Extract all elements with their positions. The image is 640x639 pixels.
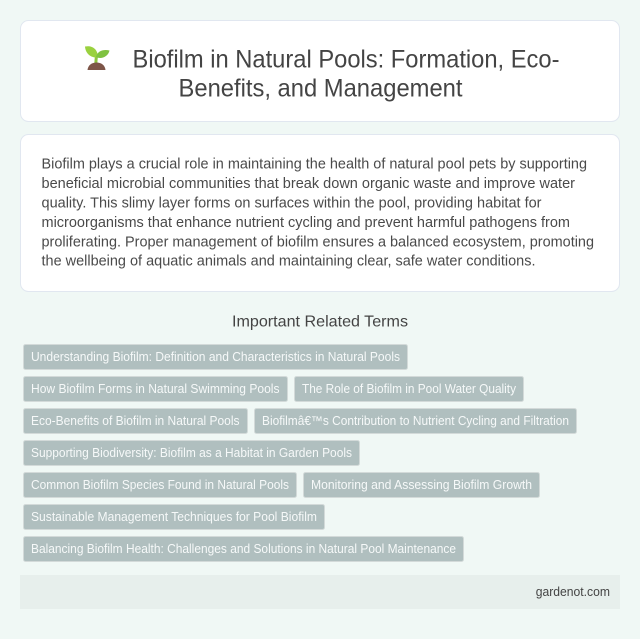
panel: title card bbox=[20, 20, 620, 122]
chip: how biofilm forms bbox=[24, 376, 288, 402]
chip: how biofilm forms: How Biofilm Forms in Natural Swimming Pools bbox=[31, 382, 280, 396]
chip: understanding biofilm bbox=[24, 344, 408, 370]
title text: Biofilm in Natural Pools: Formation, Eco- bbox=[132, 46, 560, 74]
heading: related terms: Important Related Terms bbox=[232, 314, 408, 330]
panel: related term chips bbox=[24, 344, 576, 562]
chip: sustainable management: Sustainable Management Techniques for Pool Biofilm bbox=[31, 510, 317, 524]
chip: role of biofilm: The Role of Biofilm in Pool Water Quality bbox=[302, 382, 517, 396]
description paragraph: beneficial microbial communities that break down organic waste and improve water bbox=[42, 175, 575, 192]
chip: eco-benefits bbox=[24, 408, 248, 434]
description paragraph: quality. This slimy layer forms on surfaces within the pool, providing habitat for bbox=[42, 194, 542, 211]
title text: Benefits, and Management bbox=[178, 74, 463, 102]
chip: balancing health: Balancing Biofilm Health: Challenges and Solutions in Natural Pool Maintenance bbox=[31, 542, 456, 556]
chip: eco-benefits: Eco-Benefits of Biofilm in Natural Pools bbox=[31, 414, 240, 428]
description paragraph: Biofilm plays a crucial role in maintaining the health of natural pool pets by supporting bbox=[42, 155, 587, 172]
chip: monitoring bbox=[304, 472, 540, 498]
chip: nutrient cycling bbox=[254, 408, 576, 434]
description paragraph: the wellbeing of aquatic animals and maintaining clear, safe water conditions. bbox=[42, 252, 536, 269]
footer bar bbox=[20, 575, 620, 609]
chip: supporting biodiversity bbox=[24, 440, 360, 466]
chip: balancing health bbox=[24, 536, 464, 562]
icon: sprout emoji bbox=[85, 46, 110, 70]
chip: nutrient cycling: Biofilmâ€™s Contribution to Nutrient Cycling and Filtration bbox=[262, 414, 569, 428]
description paragraph: microorganisms that enhance nutrient cycling and prevent harmful pathogens from bbox=[42, 214, 570, 231]
chip: role of biofilm bbox=[294, 376, 524, 402]
description paragraph bbox=[42, 155, 594, 269]
chip: understanding biofilm: Understanding Biofilm: Definition and Characteristics in Natural Pools bbox=[31, 350, 400, 364]
panel: description card bbox=[20, 134, 620, 292]
chip: common species bbox=[24, 472, 296, 498]
chip: sustainable management bbox=[24, 504, 324, 530]
chip: common species: Common Biofilm Species Found in Natural Pools bbox=[31, 478, 289, 492]
chip: monitoring: Monitoring and Assessing Biofilm Growth bbox=[311, 478, 532, 492]
title text bbox=[132, 46, 560, 102]
chip: supporting biodiversity: Supporting Biodiversity: Biofilm as a Habitat in Garden Pools bbox=[31, 446, 352, 460]
description paragraph: proliferating. Proper management of biofilm ensures a balanced ecosystem, promoting bbox=[42, 233, 594, 250]
footer site name: gardenot.com bbox=[536, 584, 610, 599]
